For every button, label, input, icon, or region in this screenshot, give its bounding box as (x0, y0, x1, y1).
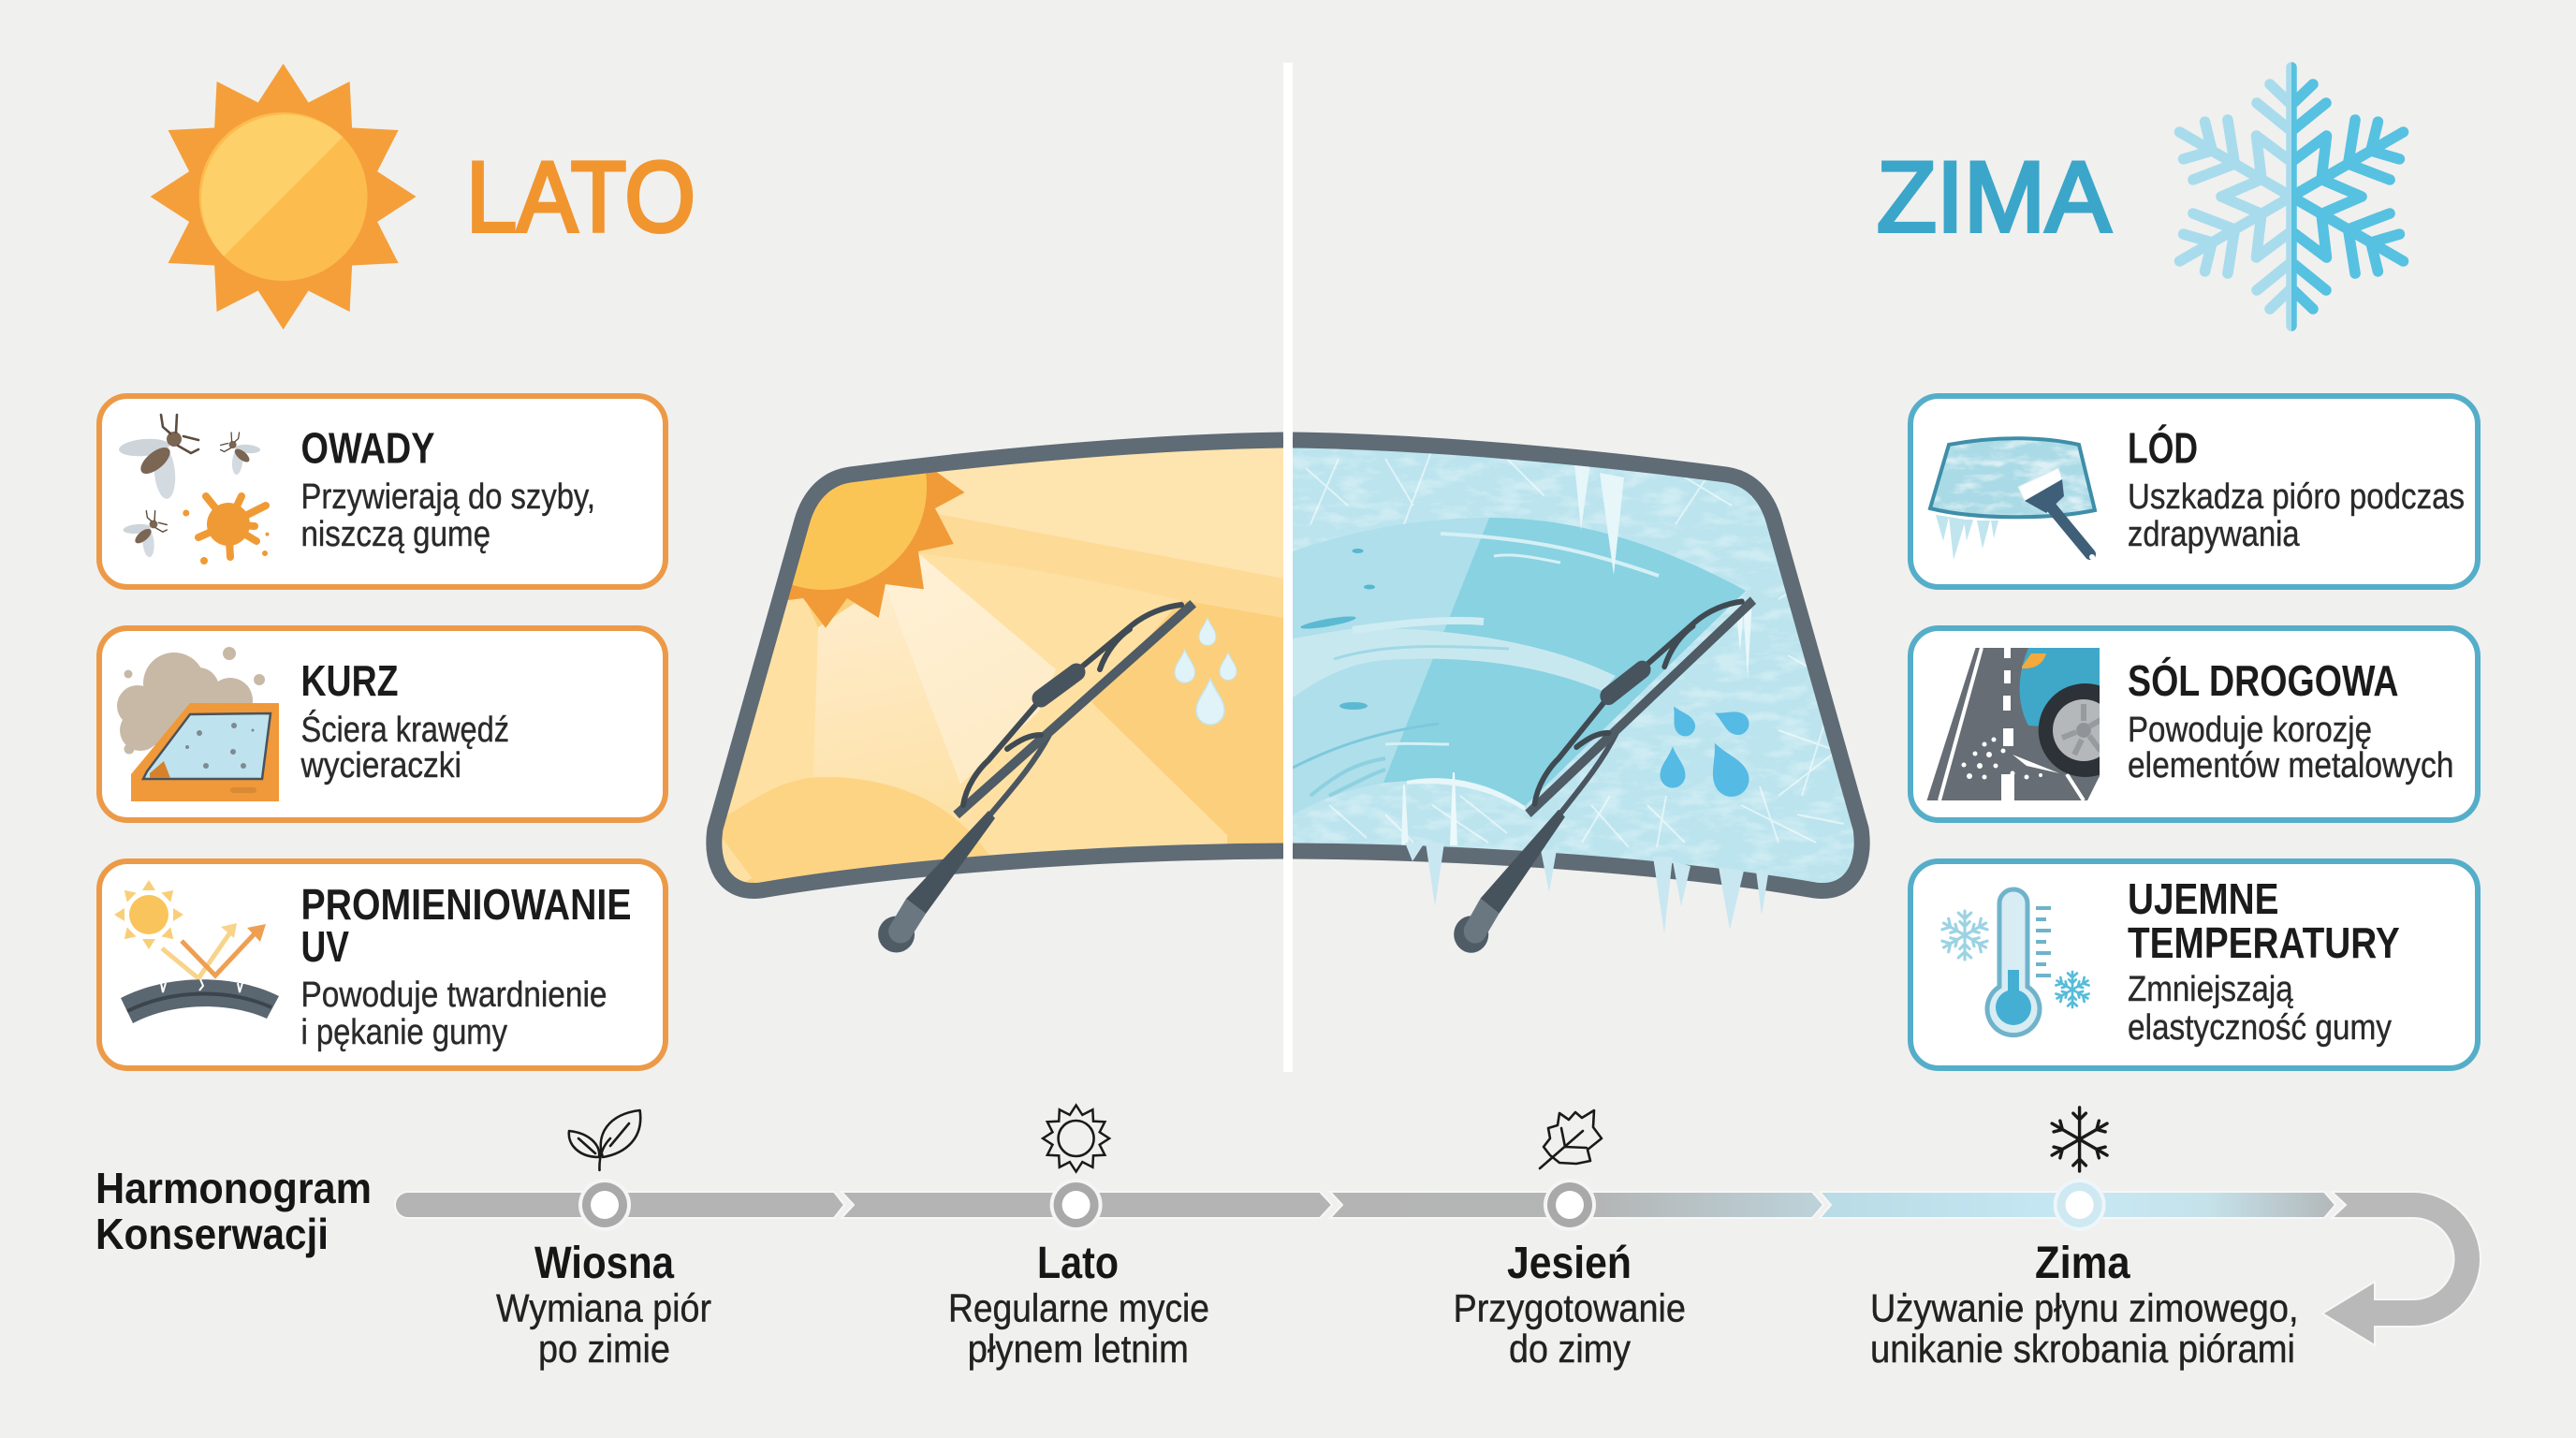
description: zdrapywania (2128, 515, 2300, 554)
description (1453, 1286, 1686, 1371)
heading: OWADY (301, 423, 434, 472)
description: elementów metalowych (2128, 746, 2453, 785)
icon: road, salt and wheel (1926, 648, 2100, 800)
label: Wiosna (534, 1239, 674, 1288)
timeline step: lato (948, 1105, 1209, 1371)
description: elastyczność gumy (2128, 1008, 2392, 1048)
frame (1293, 440, 1862, 891)
timeline title: Harmonogram (95, 1164, 372, 1212)
icon: UV on rubber (114, 880, 279, 1023)
description: i pękanie gumy (301, 1013, 507, 1052)
description: Ściera krawędź (301, 708, 509, 750)
card frame (1910, 628, 2478, 820)
description: Powoduje twardnienie (301, 976, 607, 1015)
icon: iced windshield and scraper (1924, 435, 2101, 560)
heading: LÓD (2128, 423, 2198, 472)
label: Lato (1037, 1239, 1119, 1288)
marker (2054, 1179, 2106, 1231)
panel: winter header (1877, 67, 2421, 326)
icon: thermometer and snowflakes (1940, 889, 2090, 1035)
icon: sun (151, 64, 417, 330)
description: Powoduje korozję (2128, 711, 2372, 750)
heading: KURZ (301, 656, 399, 705)
heading: LATO: LATO (466, 140, 695, 253)
timeline title: Konserwacji (95, 1210, 329, 1258)
panel: kurz (99, 628, 666, 820)
description: Przygotowanie (1453, 1286, 1686, 1330)
description (1870, 1286, 2299, 1371)
panel: summer header (151, 64, 695, 330)
panel: owady (99, 396, 666, 587)
description: unikanie skrobania piórami (1870, 1327, 2295, 1371)
description (301, 477, 595, 554)
icon: dust and car door (117, 647, 279, 801)
description: Uszkadza pióro podczas (2128, 477, 2465, 517)
panel: promieniowanie uv (99, 861, 666, 1068)
description: niszczą gumę (301, 515, 490, 554)
timeline step: wiosna (496, 1110, 711, 1371)
panel: ujemne temperatury (1910, 861, 2478, 1068)
wiper (1454, 600, 1753, 953)
heading: TEMPERATURY (2128, 918, 2400, 967)
icon: snowflake outline (2049, 1108, 2110, 1171)
card frame (99, 396, 666, 587)
frame (714, 440, 1283, 891)
label: Zima (2035, 1239, 2130, 1288)
card frame (99, 861, 666, 1068)
description (948, 1286, 1209, 1371)
icon: snowflake (2162, 67, 2421, 326)
description: wycieraczki (300, 746, 461, 785)
description (496, 1286, 711, 1371)
description: płynem letnim (968, 1327, 1189, 1371)
icicles (1405, 599, 1768, 933)
description: Zmniejszają (2128, 970, 2293, 1009)
heading: PROMIENIOWANIE (301, 880, 631, 929)
water drops (1175, 618, 1237, 725)
heading: UV (301, 922, 349, 971)
frosted glass with cleared area (1293, 448, 1854, 883)
timeline step: zima (1870, 1108, 2299, 1371)
description: Wymiana piór (496, 1286, 711, 1330)
description: Przywierają do szyby, (301, 477, 595, 517)
center divider (1283, 63, 1293, 1072)
heading: SÓL DROGOWA (2128, 656, 2398, 705)
heading (301, 880, 631, 971)
description: po zimie (538, 1327, 670, 1371)
marker (578, 1179, 631, 1231)
card frame (1910, 861, 2478, 1068)
description (2128, 711, 2453, 785)
panel: lod (1910, 396, 2478, 587)
marker (1050, 1179, 1103, 1231)
timeline step: jesien (1453, 1110, 1686, 1371)
description (301, 976, 607, 1052)
icon: sun outline (1043, 1105, 1109, 1172)
icon: sprout (569, 1110, 640, 1170)
card frame (1910, 396, 2478, 587)
timeline title (95, 1164, 372, 1258)
timeline bar (395, 1192, 2481, 1345)
marker (1544, 1179, 1596, 1231)
windshield: summer half (706, 433, 1283, 953)
icon: autumn leaf (1540, 1110, 1602, 1168)
water drops (1661, 701, 1755, 802)
description (2128, 970, 2392, 1048)
description (2128, 477, 2465, 554)
icon: insects and splat (118, 415, 270, 565)
heading: ZIMA: ZIMA (1877, 140, 2112, 253)
heading (2128, 874, 2400, 967)
heading: UJEMNE (2128, 874, 2278, 923)
windshield: winter half (1287, 421, 1886, 953)
description: do zimy (1509, 1327, 1631, 1371)
description: Regularne mycie (948, 1286, 1209, 1330)
wiper (878, 604, 1193, 953)
return arrow (2322, 1192, 2481, 1345)
description (300, 708, 509, 785)
glass with sun beams (722, 448, 1283, 883)
panel: sol drogowa (1910, 628, 2478, 820)
card frame (99, 628, 666, 820)
label: Jesień (1507, 1239, 1632, 1288)
description: Używanie płynu zimowego, (1870, 1286, 2299, 1330)
